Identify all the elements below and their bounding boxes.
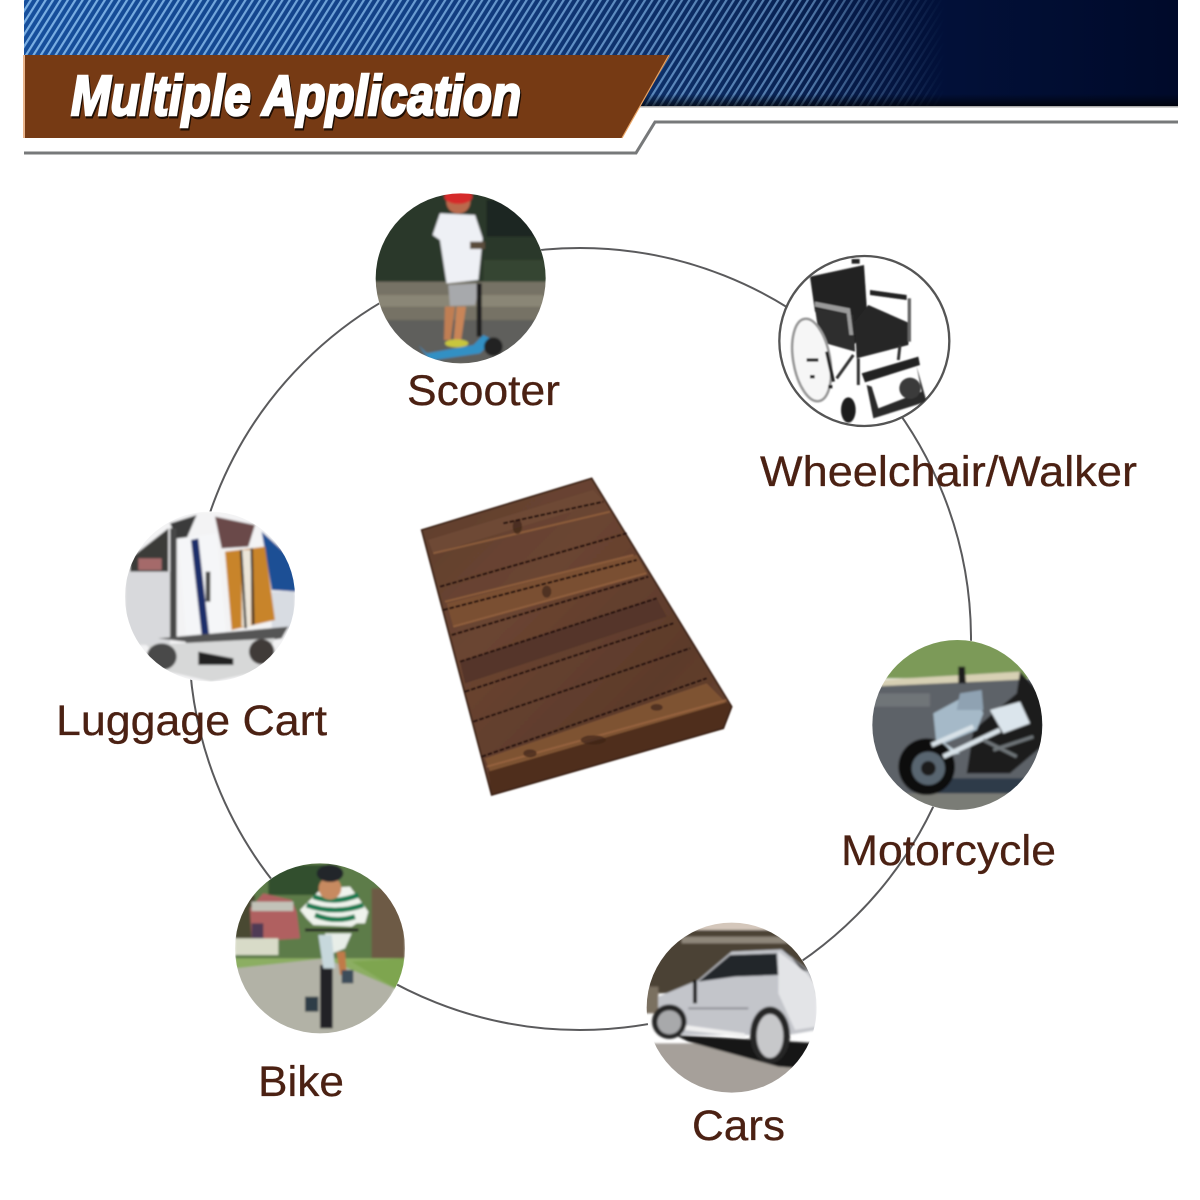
wheelchair label: Wheelchair/Walker	[760, 448, 1137, 496]
luggage cart label: Luggage Cart	[56, 697, 327, 745]
central wooden ramp	[422, 478, 732, 795]
ramp front lip	[485, 683, 727, 772]
header banner	[23, 0, 1178, 153]
scooter label: Scooter	[407, 367, 560, 415]
cars label: Cars	[692, 1102, 785, 1150]
wood knots	[513, 519, 663, 757]
motorcycle label: Motorcycle	[841, 827, 1056, 875]
node: scooter	[370, 189, 560, 415]
header outline rule	[24, 122, 1178, 153]
wheelchair photo	[779, 256, 949, 426]
node: luggage cart	[56, 511, 327, 745]
car photo	[645, 920, 822, 1097]
luggage cart photo	[125, 511, 297, 682]
motorcycle photo	[870, 637, 1047, 813]
scooter photo	[376, 193, 546, 364]
blue striped band	[24, 0, 1178, 108]
bike photo	[235, 862, 405, 1035]
title: Multiple Application	[72, 66, 522, 130]
node: motorcycle	[841, 637, 1056, 875]
node: bike	[235, 862, 405, 1106]
header banner: Multiple Application	[71, 64, 521, 128]
brown title plate	[23, 55, 670, 138]
large ring connector	[189, 248, 971, 1030]
node: cars	[645, 920, 822, 1150]
node: wheelchair	[760, 256, 1137, 496]
bike label: Bike	[258, 1058, 344, 1106]
